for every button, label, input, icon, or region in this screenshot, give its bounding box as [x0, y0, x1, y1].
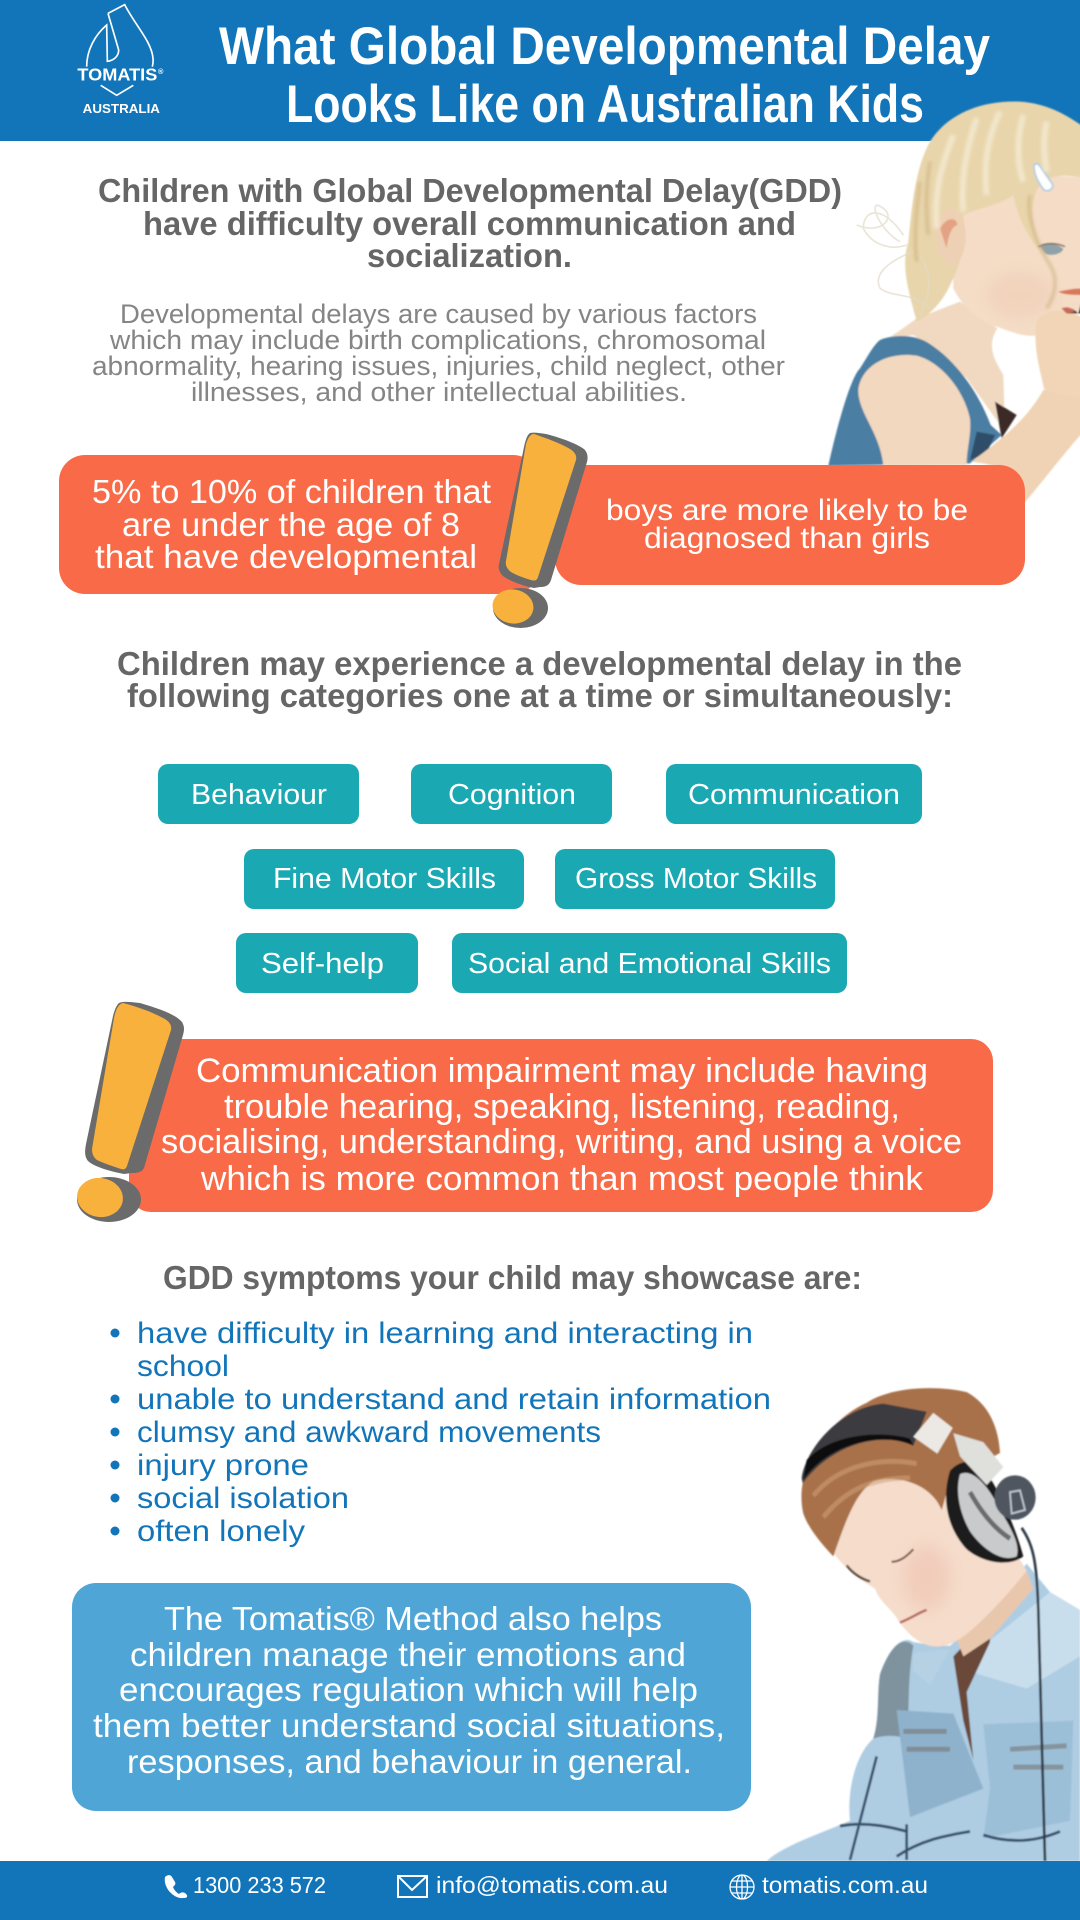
heading: children with GDD: socialization.: [367, 238, 572, 275]
list: GDD symptoms: clumsy and awkward movements: [137, 1416, 601, 1449]
category pill: Communication: [666, 764, 922, 824]
text block: causes of developmental delays: [92, 299, 785, 407]
footer band: [0, 1861, 1080, 1920]
category pill: Behaviour: Behaviour: [191, 779, 327, 811]
list: GDD symptoms: have difficulty in learning and interacting in: [137, 1317, 753, 1350]
category pill: Fine Motor Skills: [244, 849, 524, 909]
title: What Global Developmental Delay: [219, 17, 990, 76]
category pill: Behaviour: [158, 764, 359, 824]
callout: communication impairment: which is more common than most people think: [200, 1160, 924, 1198]
category pill: Gross Motor Skills: Gross Motor Skills: [575, 863, 817, 895]
category pill: Communication: Communication: [688, 779, 900, 811]
callout: communication impairment: trouble hearing, speaking, listening, reading,: [224, 1088, 900, 1126]
text block: causes of developmental delays: which may include birth complications, chromosomal: [109, 325, 766, 355]
callout: Tomatis Method: them better understand social situations,: [93, 1707, 725, 1744]
list: GDD symptoms: often lonely: [137, 1515, 305, 1548]
list: GDD symptoms: [110, 1317, 771, 1548]
heading: categories: following categories one at a time or simultaneously:: [127, 678, 953, 715]
header band: [0, 0, 1080, 141]
text block: causes of developmental delays: Developmental delays are caused by various factors: [120, 299, 757, 329]
list: GDD symptoms: social isolation: [137, 1482, 349, 1515]
callout: Tomatis Method: The Tomatis® Method also helps: [164, 1600, 662, 1637]
logo: Tomatis Australia: ®: [158, 67, 164, 76]
category pill: Social and Emotional Skills: [452, 933, 847, 993]
category pill: Self-help: Self-help: [261, 948, 384, 980]
category pill: Gross Motor Skills: [555, 849, 835, 909]
callout: Tomatis Method: responses, and behaviour in general.: [127, 1743, 692, 1780]
icon: phone: [165, 1875, 187, 1898]
callout: communication impairment: socialising, understanding, writing, and using a voice: [161, 1123, 962, 1161]
category pill: Social and Emotional Skills: Social and Emotional Skills: [468, 948, 831, 980]
title: Looks Like on Australian Kids: [286, 75, 924, 134]
text block: causes of developmental delays: illnesses, and other intellectual abilities.: [191, 377, 687, 407]
category pill: Cognition: Cognition: [448, 779, 576, 811]
list: GDD symptoms: injury prone: [137, 1449, 309, 1482]
contact: website: tomatis.com.au: [762, 1872, 928, 1898]
category pill: Cognition: [411, 764, 612, 824]
list: GDD symptoms: unable to understand and retain information: [137, 1383, 771, 1416]
heading: categories: Children may experience a developmental delay in the: [117, 646, 962, 683]
callout: boys more likely: boys are more likely to be: [606, 494, 968, 527]
photo: boy wearing headphones: [767, 1388, 1080, 1861]
callout: 5% to 10% of children: that have developmental: [95, 538, 477, 575]
callout: boys more likely: [555, 465, 1025, 585]
logo: Tomatis Australia: AUSTRALIA: [83, 101, 160, 116]
icon: globe: [730, 1875, 754, 1899]
list: GDD symptoms: school: [137, 1350, 229, 1383]
contact: email: info@tomatis.com.au: [436, 1872, 668, 1898]
callout: 5% to 10% of children: are under the age of 8: [122, 506, 460, 543]
heading: categories: [117, 646, 962, 715]
heading: children with GDD: Children with Global Developmental Delay(GDD): [98, 173, 842, 210]
category pill: Self-help: [236, 933, 418, 993]
icon: exclamation mark top: [490, 433, 588, 628]
callout: 5% to 10% of children: 5% to 10% of children that: [92, 473, 491, 510]
heading: children with GDD: have difficulty overall communication and: [143, 206, 796, 243]
heading: children with GDD: [98, 173, 842, 275]
callout: Tomatis Method: encourages regulation which will help: [119, 1671, 698, 1708]
contact: phone number: 1300 233 572: [193, 1872, 326, 1898]
text block: causes of developmental delays: abnormality, hearing issues, injuries, child neglect, other: [92, 351, 785, 381]
photo: blonde girl with hand at mouth: [828, 102, 1080, 503]
logo: Tomatis Australia: [77, 5, 164, 116]
callout: communication impairment: [129, 1039, 993, 1212]
icon: exclamation mark lower: [75, 1002, 184, 1222]
icon: email envelope: [398, 1876, 427, 1897]
callout: boys more likely: diagnosed than girls: [644, 522, 930, 555]
callout: communication impairment: Communication impairment may include having: [196, 1052, 928, 1090]
callout: 5% to 10% of children: [59, 455, 539, 594]
heading: GDD symptoms: GDD symptoms your child may showcase are:: [163, 1260, 862, 1297]
callout: Tomatis Method: [72, 1583, 751, 1811]
callout: Tomatis Method: children manage their emotions and: [130, 1636, 686, 1673]
category pill: Fine Motor Skills: Fine Motor Skills: [273, 863, 496, 895]
logo: Tomatis Australia: TOMATIS: [77, 65, 157, 85]
title: [219, 17, 990, 134]
